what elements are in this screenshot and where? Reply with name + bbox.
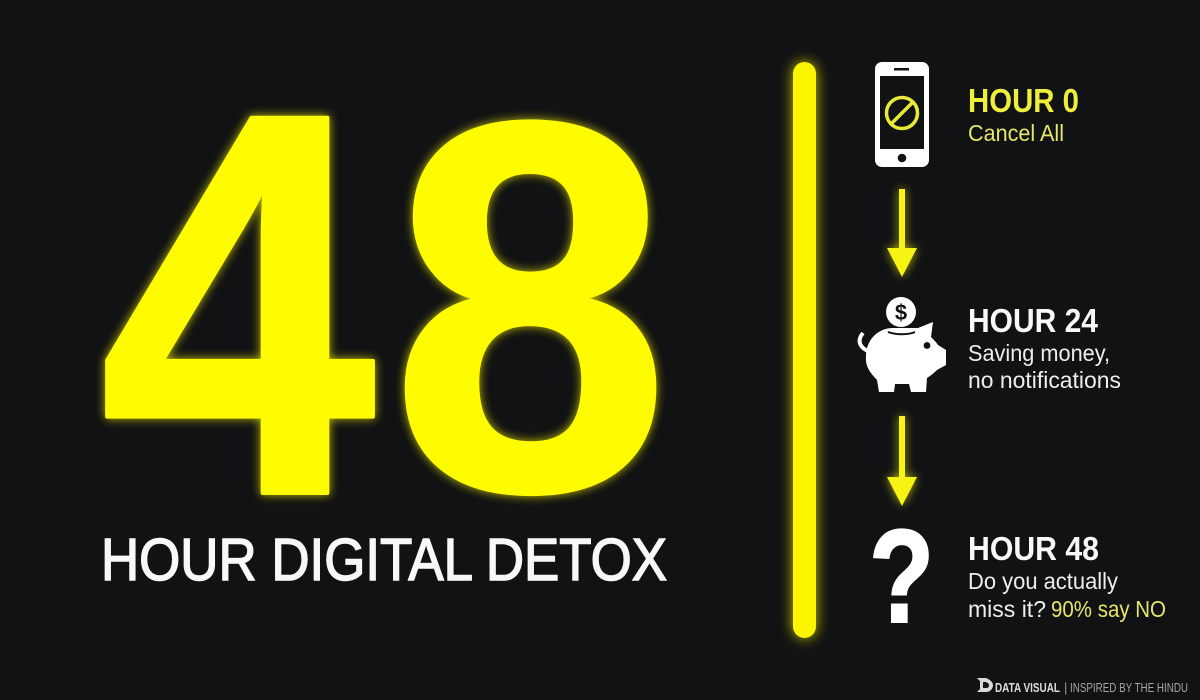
step: hour 0: Cancel All — [968, 120, 1064, 146]
glowing vertical divider — [793, 62, 816, 638]
icon: piggy bank with coin: $ — [895, 300, 907, 325]
step: hour 0: HOUR 0 — [968, 82, 1079, 119]
big number 48: 4 — [99, 0, 379, 609]
step: hour 24: HOUR 24 — [968, 302, 1099, 339]
step: hour 48: miss it? — [968, 596, 1046, 622]
step: hour 0 — [968, 82, 1079, 146]
step: hour 24: no notifications — [968, 367, 1121, 393]
big number 48: 8 — [391, 13, 670, 602]
icon: question mark: ? — [869, 503, 934, 651]
step: hour 24: Saving money, — [968, 340, 1110, 366]
big number 48 — [99, 0, 670, 609]
arrow: hour 0 to hour 24 — [887, 189, 917, 277]
footer credit: DATA VISUAL — [995, 680, 1060, 695]
icon: phone with prohibition sign — [875, 62, 929, 167]
step: hour 48 — [968, 530, 1166, 622]
step: hour 24 — [968, 302, 1121, 393]
step: hour 48: 90% say NO — [1051, 596, 1166, 622]
footer credit — [977, 678, 1188, 695]
icon: piggy bank with coin — [860, 297, 946, 392]
arrow: hour 24 to hour 48 — [887, 416, 917, 506]
title: hour digital detox: HOUR DIGITAL DETOX — [101, 527, 667, 593]
footer credit: | — [1064, 680, 1067, 695]
step: hour 48: HOUR 48 — [968, 530, 1099, 567]
step: hour 48: Do you actually — [968, 568, 1118, 594]
